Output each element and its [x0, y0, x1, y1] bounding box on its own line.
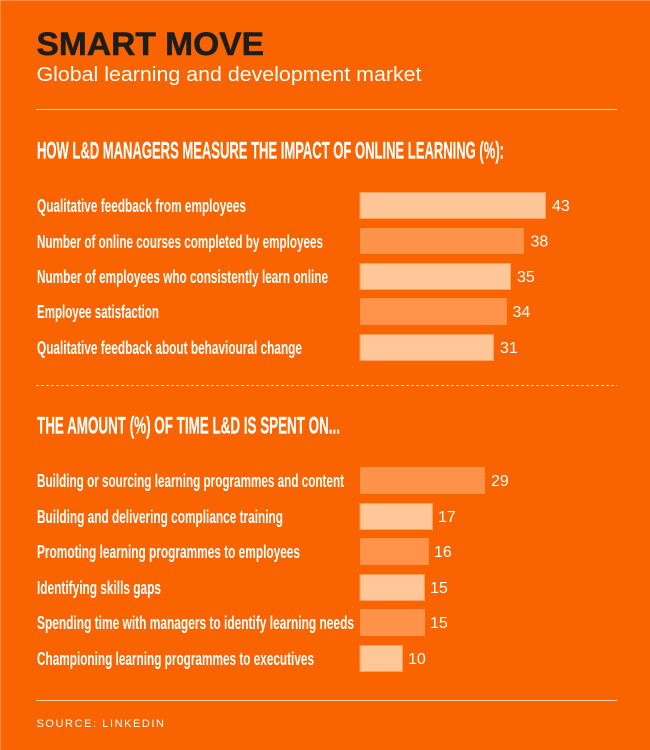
row: compliance training, 17: [37, 504, 456, 530]
row: skills gaps, 15: Identifying skills gaps: [37, 578, 161, 598]
row: compliance training, 17: 17: [438, 509, 456, 526]
row: employees consistently learn online, 35: [37, 264, 535, 290]
row: employee satisfaction, 34: [37, 298, 530, 325]
row: online courses completed, 38: Number of online courses completed by employees: [37, 232, 323, 252]
row: promoting programmes, 16: 16: [434, 544, 452, 561]
row: skills gaps, 15: 15: [430, 580, 448, 597]
bar chart: time spent: [37, 467, 509, 672]
row: time with managers, 15: 15: [430, 615, 448, 632]
row: qualitative feedback from employees, 43: [37, 192, 570, 218]
row: employee satisfaction, 34: 34: [512, 304, 530, 321]
row: online courses completed, 38: 38: [530, 234, 548, 250]
row: championing to executives, 10: 10: [408, 651, 426, 668]
row: feedback about behavioural change, 31: [37, 334, 518, 360]
row: feedback about behavioural change, 31: Qualitative feedback about behavioural change: [37, 338, 302, 358]
row: time with managers, 15: [37, 609, 448, 636]
row: online courses completed, 38: [37, 228, 548, 254]
row: promoting programmes, 16: Promoting learning programmes to employees: [37, 542, 300, 562]
source: SOURCE: LINKEDIN: [36, 718, 164, 730]
heading: time spent: THE AMOUNT (%) OF TIME L&D IS SPENT ON...: [37, 412, 340, 440]
row: compliance training, 17: Building and delivering compliance training: [37, 507, 283, 527]
row: building or sourcing programmes, 29: 29: [491, 473, 509, 490]
subtitle: Global learning and development market: [36, 64, 422, 86]
row: qualitative feedback from employees, 43: Qualitative feedback from employees: [37, 196, 246, 216]
row: feedback about behavioural change, 31: 31: [500, 340, 518, 357]
row: employees consistently learn online, 35: 35: [517, 269, 535, 286]
row: skills gaps, 15: [37, 574, 448, 600]
row: time with managers, 15: Spending time with managers to identify learning needs: [37, 613, 354, 633]
title: SMART MOVE: [36, 26, 264, 62]
row: employees consistently learn online, 35: Number of employees who consistently learn online: [37, 267, 328, 287]
row: building or sourcing programmes, 29: Building or sourcing learning programmes and content: [37, 471, 344, 491]
bar chart: impact measures: [37, 192, 570, 360]
row: qualitative feedback from employees, 43: 43: [552, 198, 570, 215]
row: employee satisfaction, 34: Employee satisfaction: [37, 302, 159, 322]
row: championing to executives, 10: Championing learning programmes to executives: [37, 649, 314, 669]
